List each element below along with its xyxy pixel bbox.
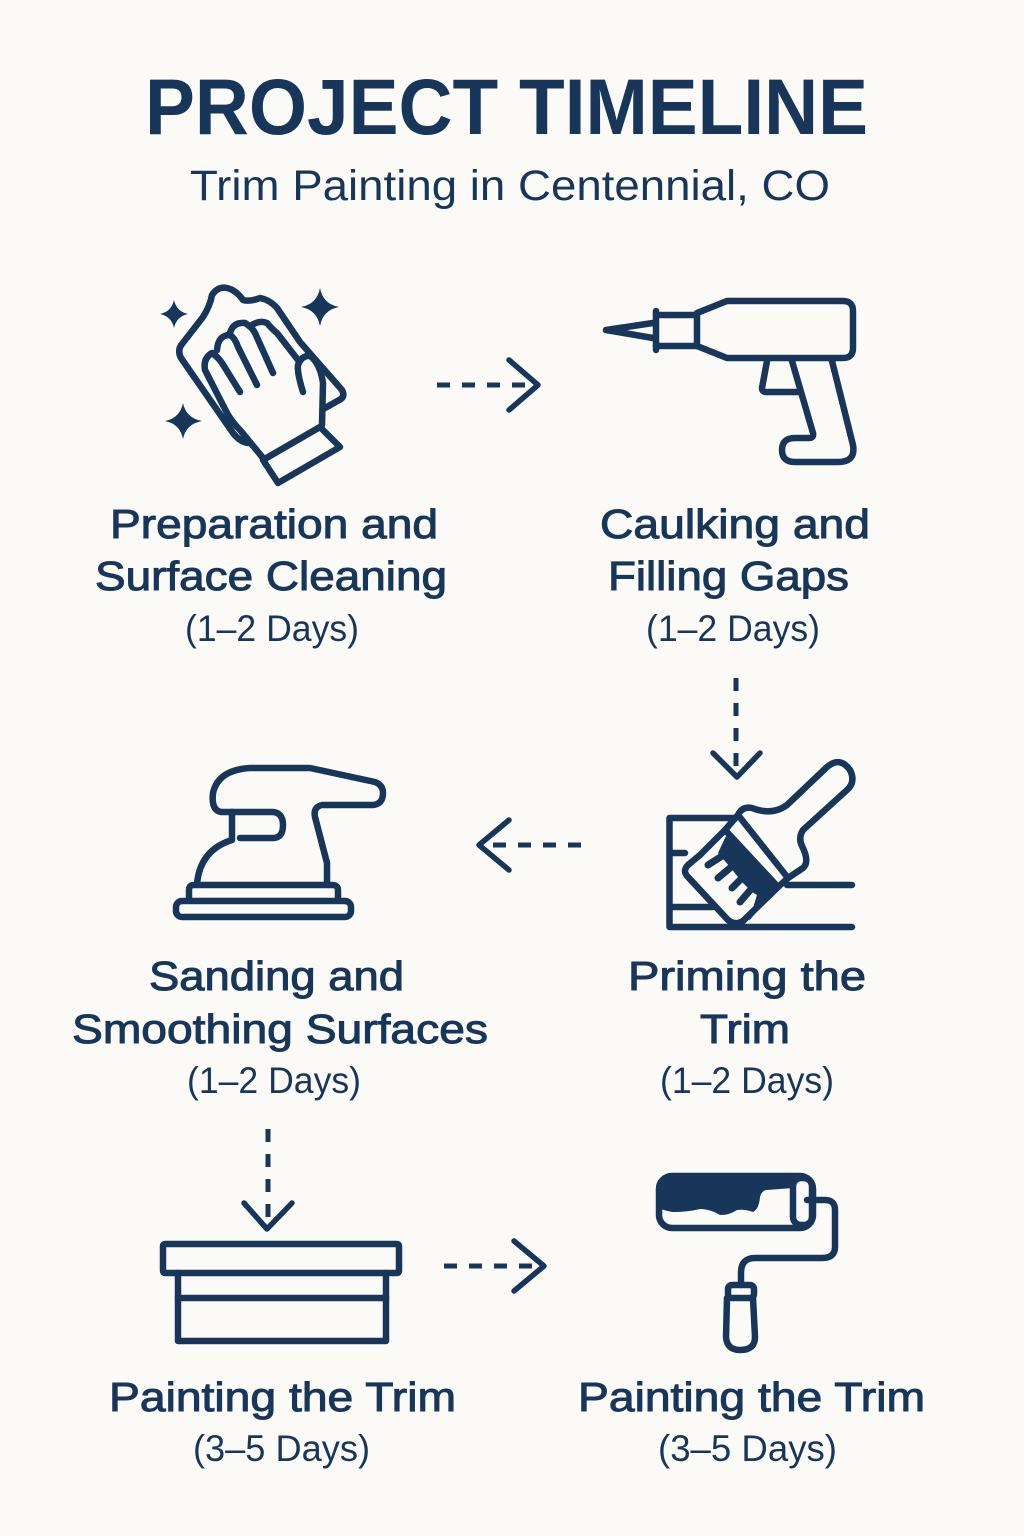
step: sanding and smoothing surfaces [72, 768, 488, 1101]
arrow: painting to final coat [444, 1241, 544, 1291]
duration: (1–2 Days) [646, 608, 820, 649]
icon: trim board [163, 1244, 399, 1341]
duration: (3–5 Days) [193, 1428, 370, 1469]
duration: (1–2 Days) [187, 1060, 361, 1101]
heading: Sanding and [149, 953, 404, 999]
icon: gloved hand wiping with cloth and sparkles [160, 288, 343, 483]
heading [72, 953, 488, 1052]
step: painting the trim, first coat [109, 1244, 456, 1469]
icon: paint roller [659, 1176, 835, 1350]
duration: (1–2 Days) [185, 608, 359, 649]
icon: orbital sander [176, 768, 383, 917]
heading: Painting the Trim [578, 1374, 925, 1420]
step: preparation and surface cleaning [95, 288, 447, 649]
step: priming the trim [628, 762, 866, 1101]
arrow: priming to sanding [479, 820, 581, 870]
subtitle: Trim Painting in Centennial, CO [190, 162, 830, 210]
heading: Trim [700, 1006, 790, 1052]
step: caulking and filling gaps [600, 301, 870, 649]
heading: Priming the [628, 953, 866, 999]
heading [600, 501, 870, 599]
arrow: sanding to painting [244, 1129, 292, 1229]
icon: caulk gun [606, 301, 853, 462]
title: PROJECT TIMELINE [145, 62, 868, 151]
heading: Caulking and [600, 501, 870, 547]
duration: (3–5 Days) [658, 1428, 837, 1469]
heading: Smoothing Surfaces [72, 1006, 488, 1052]
heading: Painting the Trim [109, 1374, 456, 1420]
heading [95, 501, 447, 599]
heading: Filling Gaps [608, 553, 849, 599]
duration: (1–2 Days) [660, 1060, 834, 1101]
arrow: preparation to caulking [437, 360, 538, 410]
heading: Surface Cleaning [95, 553, 447, 599]
heading [628, 953, 866, 1052]
icon: paint brush on trim corner [670, 762, 852, 927]
step: painting the trim, second coat [578, 1176, 925, 1469]
heading: Preparation and [110, 501, 438, 547]
arrow: caulking to priming [713, 678, 760, 777]
